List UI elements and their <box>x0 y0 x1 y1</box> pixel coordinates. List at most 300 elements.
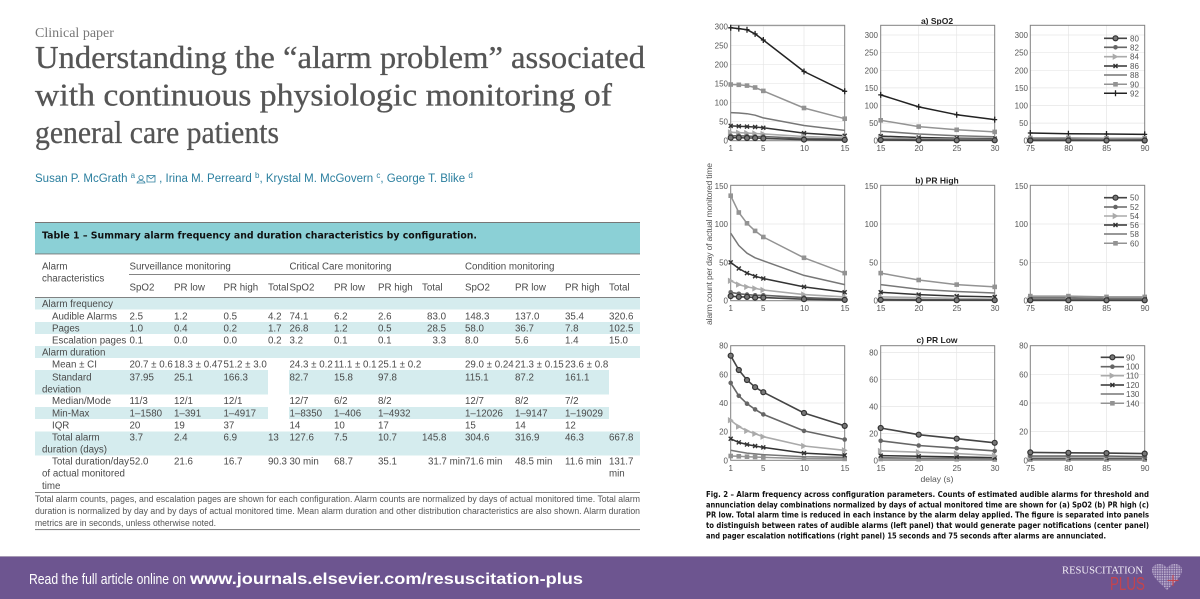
table section: alarm duration: 13 <box>268 432 279 444</box>
table section: alarm frequency: 1.2 <box>174 312 188 322</box>
legend: PR High thresholds: 58 <box>1130 230 1139 239</box>
chart: PR Low center panel: 80 <box>869 348 879 358</box>
chart: b) PR High row <box>715 176 1150 313</box>
chart title: b) PR High: b) PR High <box>915 176 959 186</box>
chart: a) SpO2 row <box>715 16 1150 153</box>
table section: alarm duration: 10.7 <box>378 432 397 444</box>
table section: alarm frequency: 0.5 <box>224 312 238 322</box>
table section: alarm duration: 23.6 ± 0.8 <box>565 360 608 370</box>
table section: alarm duration: 12/7 <box>465 396 484 407</box>
table section: alarm frequency: 0.1 <box>334 336 348 346</box>
table column headers: Total <box>609 282 630 294</box>
chart: PR High center panel: 25 <box>952 304 962 313</box>
chart: SpO2 center panel: 15 <box>876 144 886 153</box>
chart: PR High center panel: 15 <box>876 304 886 313</box>
table column headers: Condition monitoring <box>465 262 554 272</box>
table section: alarm duration: 82.7 <box>290 372 308 384</box>
table section: alarm duration: 3.7 <box>130 432 143 444</box>
table column headers: SpO2 <box>130 282 154 294</box>
legend: PR Low thresholds: 100 <box>1126 363 1140 372</box>
table footnote: Total alarm counts, pages, and escalation pages are shown for each configuration. Alarm counts are normalized by days of actual monitored time. Total alarm <box>35 494 640 504</box>
table section: alarm duration: 1–8350 <box>290 408 323 420</box>
legend: PR High thresholds <box>1104 194 1139 248</box>
table section: alarm duration: 12 <box>565 420 576 432</box>
chart: PR High left panel: 50 <box>719 258 729 267</box>
authors: , Irina M. Perreard <box>159 173 255 185</box>
chart: SpO2 right panel with legend: 75 <box>1026 144 1035 153</box>
table section: alarm duration: 15.8 <box>334 372 353 384</box>
chart: PR Low right panel with legend <box>1019 342 1150 473</box>
footer call to action: www.journals.elsevier.com/resuscitation-plus <box>189 571 583 588</box>
table section: alarm frequency: 36.7 <box>515 324 534 334</box>
table title band: Table 1 – Summary alarm frequency and duration characteristics by configuration. <box>42 230 477 242</box>
article title: general care patients <box>35 114 279 150</box>
chart: SpO2 center panel: 30 <box>990 144 1000 153</box>
chart: PR Low center panel: 30 <box>990 464 1000 473</box>
table section: alarm duration: 10 <box>334 420 345 432</box>
chart: PR High right panel with legend: 50 <box>1019 258 1029 267</box>
table column headers: PR low <box>515 282 547 294</box>
table section: alarm duration: 161.1 <box>565 372 589 384</box>
table section: alarm frequency: 1.2 <box>334 324 348 334</box>
table column headers: PR high <box>565 282 600 294</box>
figure caption: and pager escalation notifications (right panel) 15 seconds and 75 seconds after alarms are annunciated. <box>706 532 1106 540</box>
table section: alarm duration: 17 <box>378 420 389 432</box>
chart: PR High center panel: 100 <box>865 220 879 229</box>
chart: PR Low center panel <box>869 346 1000 473</box>
table column headers: characteristics <box>42 274 104 284</box>
table section: alarm duration: 12/7 <box>290 396 308 407</box>
table section: alarm frequency: 74.1 <box>290 312 308 322</box>
authors: , Krystal M. McGovern <box>259 173 376 185</box>
table section: alarm frequency: 58.0 <box>465 324 485 334</box>
chart: PR Low center panel: 25 <box>952 464 962 473</box>
chart: PR High center panel: 0 <box>874 297 879 306</box>
table section: alarm duration: 2.4 <box>174 432 188 444</box>
chart: PR Low center panel: 20 <box>869 429 879 438</box>
chart: PR Low left panel <box>719 342 850 473</box>
chart: PR Low left panel: 15 <box>840 464 850 473</box>
chart: SpO2 left panel: 15 <box>840 144 850 153</box>
chart: SpO2 right panel with legend: 90 <box>1140 144 1150 153</box>
legend: PR Low thresholds: 110 <box>1126 372 1139 381</box>
chart: PR Low left panel: 40 <box>719 399 729 408</box>
table section: alarm frequency: 137.0 <box>515 312 540 322</box>
chart: SpO2 center panel: 20 <box>914 144 924 153</box>
chart: SpO2 left panel: 100 <box>715 99 729 108</box>
figure caption <box>706 490 1149 540</box>
table section: alarm frequency: 3.3 <box>432 336 446 346</box>
table footnote: metrics are in seconds, unless otherwise noted. <box>35 518 216 528</box>
table section: alarm duration: 31.7 min <box>428 456 465 468</box>
table section: alarm duration: 48.5 min <box>515 456 552 468</box>
legend: PR High thresholds: 52 <box>1130 203 1139 212</box>
legend: PR High thresholds: 54 <box>1130 212 1139 221</box>
table section: alarm duration: 71.6 min <box>465 456 502 468</box>
table section: alarm duration: Total alarm <box>52 432 100 444</box>
chart: SpO2 center panel: 0 <box>874 137 879 146</box>
chart: SpO2 center panel: 100 <box>865 102 879 110</box>
legend: PR Low thresholds: 90 <box>1126 353 1135 362</box>
table section: alarm duration: 8/2 <box>378 396 392 407</box>
table section: alarm duration: time <box>42 481 60 492</box>
authors: Susan P. McGrath <box>35 173 127 185</box>
table section: alarm duration: 12/1 <box>174 396 193 407</box>
table column headers: Critical Care monitoring <box>290 262 391 272</box>
chart: PR High left panel: 5 <box>761 304 766 313</box>
chart: PR Low right panel with legend: 40 <box>1019 399 1029 408</box>
table section: alarm frequency: 0.5 <box>378 324 392 334</box>
chart: PR High right panel with legend: 80 <box>1064 304 1074 313</box>
chart: SpO2 center panel: 250 <box>865 49 879 58</box>
chart: PR Low left panel: 60 <box>719 370 729 379</box>
table section: alarm duration: 1–12026 <box>465 408 503 420</box>
table section: alarm frequency: 102.5 <box>609 324 634 334</box>
chart: PR High right panel with legend: 85 <box>1102 304 1112 313</box>
table section: alarm duration: 1–406 <box>334 408 361 420</box>
legend: SpO2 thresholds <box>1104 34 1139 98</box>
table section: alarm frequency: 3.2 <box>290 336 303 346</box>
journal logo: PLUS <box>1110 574 1145 594</box>
x axis label: delay (s) <box>921 474 954 484</box>
table section: alarm duration: 166.3 <box>224 372 248 384</box>
table section: alarm frequency: 0.1 <box>378 336 392 346</box>
chart: PR High center panel: 150 <box>865 182 879 191</box>
chart: PR High right panel with legend: 75 <box>1026 304 1035 313</box>
table section: alarm duration: 1–391 <box>174 408 201 420</box>
authors: , George T. Blike <box>380 173 468 185</box>
table section: alarm frequency: 1.4 <box>565 336 579 346</box>
figure caption: annunciation delay combinations normalized by days of actual monitored time are shown for (a) SpO2 (b) PR high (c) <box>706 500 1149 510</box>
chart: SpO2 left panel <box>715 23 850 153</box>
chart: SpO2 center panel: 50 <box>869 119 879 128</box>
table column headers: PR low <box>334 282 366 294</box>
table section: alarm duration: 24.3 ± 0.2 <box>290 360 333 370</box>
table section: alarm duration: 11.6 min <box>565 456 602 468</box>
legend: PR High thresholds: 56 <box>1130 221 1139 230</box>
figure caption: to distinguish between rates of audible alarms (left panel) that would generate pager notifications (center panel) <box>706 521 1149 530</box>
table section: alarm duration: 11.1 ± 0.1 <box>334 360 377 370</box>
chart: SpO2 right panel with legend: 80 <box>1064 144 1074 153</box>
chart: PR High right panel with legend: 150 <box>1015 182 1029 191</box>
table section: alarm frequency: Alarm frequency <box>42 299 113 310</box>
table section: alarm duration: 131.7 <box>609 456 633 468</box>
table footnote: duration is normalized by day and by days of actual monitored time. Mean alarm duration and other distribution characteristics are also shown. Alarm duration <box>35 506 640 516</box>
chart: PR Low right panel with legend: 80 <box>1064 464 1074 473</box>
chart: PR High left panel: 1 <box>728 304 734 313</box>
legend: SpO2 thresholds: 82 <box>1130 43 1139 52</box>
table section: alarm duration: 14 <box>290 420 301 432</box>
table section: alarm duration: Median/Mode <box>52 396 111 407</box>
y axis label: alarm count per day of actual monitored time <box>704 163 714 325</box>
table column headers: PR high <box>224 282 258 294</box>
table shaded rows <box>35 297 640 456</box>
table section: alarm frequency: 28.5 <box>427 324 447 334</box>
legend: PR Low thresholds: 140 <box>1126 399 1140 408</box>
table section: alarm duration: 1–19029 <box>565 408 603 420</box>
table section: alarm duration: Total duration/day <box>52 456 129 468</box>
table section: alarm frequency: 8.0 <box>465 336 479 346</box>
table section: alarm duration: IQR <box>52 420 69 432</box>
legend: PR Low thresholds: 130 <box>1126 390 1140 399</box>
table section: alarm duration: 7.5 <box>334 432 348 444</box>
table section: alarm duration: 25.1 <box>174 372 193 384</box>
article header <box>35 26 645 185</box>
table section: alarm duration: 30 min <box>290 456 319 468</box>
chart: SpO2 center panel: 200 <box>865 66 879 75</box>
table section: alarm frequency: 148.3 <box>465 312 489 322</box>
table section: alarm frequency: 5.6 <box>515 336 529 346</box>
footer call to action <box>29 571 583 588</box>
chart: PR Low left panel: 20 <box>719 428 729 437</box>
table section: alarm frequency: 83.0 <box>427 312 447 322</box>
panel: table 1 <box>35 222 640 530</box>
table section: alarm frequency: 15.0 <box>609 336 629 346</box>
table section: alarm frequency: Escalation pages <box>52 336 126 346</box>
article title <box>35 39 645 150</box>
chart: PR High right panel with legend <box>1015 182 1150 313</box>
chart: PR High left panel <box>715 182 850 313</box>
chart: PR Low right panel with legend: 85 <box>1102 464 1112 473</box>
chart: PR Low center panel: 60 <box>869 376 879 384</box>
table section: alarm frequency: 35.4 <box>565 312 585 322</box>
table column headers: Surveillance monitoring <box>130 262 231 272</box>
legend: SpO2 thresholds: 80 <box>1130 34 1139 43</box>
chart: SpO2 left panel: 5 <box>761 144 766 153</box>
table column headers <box>42 262 630 294</box>
table section: alarm duration: 14 <box>515 420 526 432</box>
table section: alarm duration <box>42 348 633 492</box>
legend: PR High thresholds: 60 <box>1130 239 1139 248</box>
table section: alarm duration: 25.1 ± 0.2 <box>378 360 421 370</box>
chart: SpO2 center panel <box>865 25 1000 153</box>
journal logo: RESUSCITATION <box>1062 564 1143 576</box>
authors: b <box>255 171 260 180</box>
chart: SpO2 right panel with legend: 250 <box>1015 49 1029 58</box>
table column headers: SpO2 <box>290 282 314 294</box>
legend: PR Low thresholds: 120 <box>1126 381 1140 390</box>
table section: alarm duration: 8/2 <box>515 396 529 407</box>
table section: alarm duration: 37 <box>224 420 234 432</box>
chart: PR High left panel: 0 <box>724 297 729 306</box>
table section: alarm duration: 667.8 <box>609 432 633 444</box>
table section: alarm frequency: 7.8 <box>565 324 579 334</box>
table section: alarm duration: 145.8 <box>422 432 446 444</box>
authors: c <box>376 171 380 180</box>
table section: alarm duration: 51.2 ± 3.0 <box>224 360 267 370</box>
journal logo <box>1062 564 1182 594</box>
table section: alarm duration: 1–9147 <box>515 408 548 420</box>
table section: alarm duration: 16.7 <box>224 456 242 468</box>
table section: alarm frequency: Audible Alarms <box>52 312 117 322</box>
chart: SpO2 left panel: 300 <box>715 23 729 32</box>
chart: SpO2 right panel with legend: 100 <box>1015 102 1029 110</box>
chart: SpO2 right panel with legend: 150 <box>1015 84 1029 93</box>
table footnote <box>35 494 640 528</box>
chart: SpO2 left panel: 0 <box>724 137 729 146</box>
table section: alarm duration: 115.1 <box>465 372 489 384</box>
table column headers: PR high <box>378 282 413 294</box>
chart: PR Low left panel: 1 <box>728 464 734 473</box>
chart: PR Low right panel with legend: 90 <box>1140 464 1150 473</box>
chart: SpO2 right panel with legend: 200 <box>1015 66 1029 75</box>
table column headers: PR low <box>174 282 206 294</box>
chart: PR High left panel: 10 <box>800 304 809 313</box>
table section: alarm duration: 21.6 <box>174 456 193 468</box>
table section: alarm duration: 12/1 <box>224 396 242 407</box>
figure caption: Fig. 2 – Alarm frequency across configuration parameters. Counts of estimated audible alarms for threshold and <box>706 490 1149 499</box>
table column headers: Total <box>422 282 443 294</box>
chart: PR Low right panel with legend: 20 <box>1019 428 1029 437</box>
table section: alarm duration: 21.3 ± 0.15 <box>515 360 564 370</box>
table section: alarm duration: duration (days) <box>42 444 107 456</box>
chart title: a) SpO2: a) SpO2 <box>921 16 953 26</box>
table section: alarm frequency: 6.2 <box>334 312 348 322</box>
table section: alarm duration: 19 <box>174 420 185 432</box>
chart: SpO2 right panel with legend: 300 <box>1015 31 1029 40</box>
table section: alarm duration: 18.3 ± 0.47 <box>174 360 223 370</box>
table title band <box>35 222 640 254</box>
chart: SpO2 right panel with legend <box>1015 25 1150 153</box>
legend: SpO2 thresholds: 86 <box>1130 62 1139 71</box>
legend: PR High thresholds: 50 <box>1130 194 1139 203</box>
table section: alarm frequency: Pages <box>52 324 80 334</box>
chart: SpO2 center panel: 300 <box>865 31 879 40</box>
chart: PR Low left panel: 80 <box>719 342 729 351</box>
chart: PR Low right panel with legend: 80 <box>1019 342 1029 351</box>
footer banner <box>0 556 1200 599</box>
table section: alarm duration: Mean ± CI <box>52 360 97 370</box>
table section: alarm duration: 68.7 <box>334 456 353 468</box>
table section: alarm duration: 316.9 <box>515 432 539 444</box>
chart: PR Low left panel: 5 <box>761 464 766 473</box>
table section: alarm duration: Standard <box>52 372 92 384</box>
table section: alarm frequency: 4.2 <box>268 312 282 322</box>
chart: PR Low center panel: 0 <box>874 456 879 465</box>
chart: SpO2 center panel: 150 <box>865 84 879 93</box>
table column headers: Alarm <box>42 262 67 272</box>
table section: alarm duration: 1–1580 <box>130 408 163 420</box>
table section: alarm duration: 87.2 <box>515 372 534 384</box>
table section: alarm frequency: 2.5 <box>130 312 144 322</box>
table section: alarm duration: 90.3 <box>268 456 287 468</box>
table section: alarm duration: 37.95 <box>130 372 154 384</box>
table section: alarm duration: 46.3 <box>565 432 584 444</box>
table section: alarm frequency: 0.4 <box>174 324 188 334</box>
table section: alarm duration: 1–4917 <box>224 408 256 420</box>
chart: PR High left panel: 100 <box>715 220 729 229</box>
table section: alarm duration: 1–4932 <box>378 408 411 420</box>
chart: PR Low left panel: 0 <box>724 456 729 465</box>
chart: PR Low center panel: 20 <box>914 464 924 473</box>
table section: alarm frequency: 0.0 <box>224 336 238 346</box>
chart: SpO2 left panel: 10 <box>800 144 809 153</box>
table section: alarm duration: 7/2 <box>565 396 579 407</box>
table section: alarm frequency: 1.0 <box>130 324 144 334</box>
chart: PR High center panel: 20 <box>914 304 924 313</box>
chart: PR High left panel: 150 <box>715 182 729 191</box>
table section: alarm duration: 97.8 <box>378 372 397 384</box>
legend: PR Low thresholds <box>1101 353 1140 408</box>
legend: SpO2 thresholds: 88 <box>1130 71 1139 80</box>
table section: alarm duration: 6.9 <box>224 432 237 444</box>
figure caption: PR low. Total alarm time is reduced in each instance by the alarm delay applied. The figure is separated into panels <box>706 510 1149 520</box>
table section: alarm duration: 20.7 ± 0.6 <box>130 360 173 370</box>
article title: with continuous physiologic monitoring of <box>35 76 612 112</box>
authors <box>35 171 473 185</box>
chart: SpO2 left panel: 150 <box>715 80 729 89</box>
table section: alarm duration: 29.0 ± 0.24 <box>465 360 514 370</box>
legend: SpO2 thresholds: 84 <box>1130 53 1139 62</box>
table section: alarm duration: 15 <box>465 420 476 432</box>
chart: SpO2 left panel: 200 <box>715 61 729 70</box>
chart: PR High center panel: 30 <box>990 304 1000 313</box>
chart: PR High center panel: 50 <box>869 258 879 267</box>
legend: SpO2 thresholds: 92 <box>1130 89 1139 98</box>
chart: SpO2 right panel with legend: 0 <box>1024 137 1029 146</box>
table section: alarm duration: of actual monitored <box>42 468 125 480</box>
article type label: Clinical paper <box>35 26 114 41</box>
chart: PR Low center panel: 15 <box>876 464 886 473</box>
table section: alarm frequency: 0.2 <box>224 324 237 334</box>
chart: SpO2 center panel: 25 <box>952 144 962 153</box>
article title: Understanding the “alarm problem” associated <box>35 39 645 75</box>
table section: alarm duration: 35.1 <box>378 456 397 468</box>
table section: alarm duration: 6/2 <box>334 396 348 407</box>
table section: alarm frequency <box>42 299 634 346</box>
chart: PR High right panel with legend: 100 <box>1015 220 1029 229</box>
chart: PR High right panel with legend: 0 <box>1024 297 1029 306</box>
footer call to action: Read the full article online on <box>29 571 186 588</box>
table section: alarm duration: 52.0 <box>130 456 149 468</box>
chart: c) PR Low row <box>719 335 1150 473</box>
chart: PR Low right panel with legend: 75 <box>1026 464 1035 473</box>
table section: alarm frequency: 320.6 <box>609 312 633 322</box>
chart: SpO2 right panel with legend: 85 <box>1102 144 1112 153</box>
table section: alarm duration: Alarm duration <box>42 348 105 358</box>
table section: alarm frequency: 0.2 <box>268 336 282 346</box>
table section: alarm duration: deviation <box>42 384 81 396</box>
table section: alarm frequency: 0.0 <box>174 336 188 346</box>
table section: alarm duration: 127.6 <box>290 432 314 444</box>
chart: SpO2 left panel: 1 <box>728 144 734 153</box>
chart: SpO2 left panel: 50 <box>719 118 729 127</box>
chart: PR Low left panel: 10 <box>800 464 809 473</box>
authors: d <box>468 171 473 180</box>
chart title: c) PR Low: c) PR Low <box>916 335 958 345</box>
chart: PR High left panel: 15 <box>840 304 850 313</box>
chart: SpO2 right panel with legend: 50 <box>1019 119 1029 128</box>
chart: PR Low right panel with legend: 60 <box>1019 370 1029 379</box>
table section: alarm duration: 304.6 <box>465 432 489 444</box>
chart: PR Low center panel: 40 <box>869 402 879 411</box>
table column headers: Total <box>268 282 289 294</box>
table section: alarm duration: 20 <box>130 420 141 432</box>
table section: alarm frequency: 2.6 <box>378 312 392 322</box>
table section: alarm frequency: 26.8 <box>290 324 308 334</box>
chart: SpO2 left panel: 250 <box>715 42 729 51</box>
legend: SpO2 thresholds: 90 <box>1130 80 1139 89</box>
table section: alarm duration: 11/3 <box>130 396 148 407</box>
table column headers: SpO2 <box>465 282 490 294</box>
authors: a <box>131 171 136 180</box>
chart: PR High center panel <box>865 182 1000 313</box>
table section: alarm duration: min <box>609 468 625 480</box>
chart: PR High right panel with legend: 90 <box>1140 304 1150 313</box>
table section: alarm frequency: 1.7 <box>268 324 282 334</box>
table section: alarm frequency: 0.1 <box>130 336 143 346</box>
table section: alarm duration: Min-Max <box>52 408 90 420</box>
